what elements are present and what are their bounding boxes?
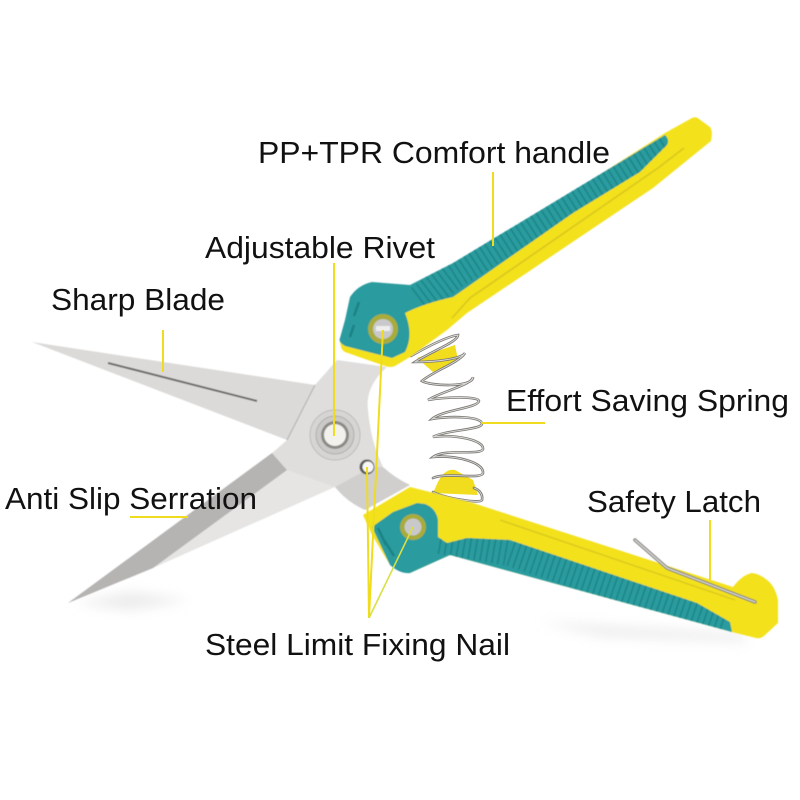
- grip ribs: [420, 140, 665, 300]
- spring and caps: [411, 335, 483, 501]
- infographic: pruning shears diagram: [5, 116, 787, 662]
- label: Safety Latch: Safety Latch: [587, 484, 761, 519]
- label: PP+TPR Comfort handle: PP+TPR Comfort handle: [258, 135, 610, 170]
- label: Steel Limit Fixing Nail: Steel Limit Fixing Nail: [205, 627, 510, 662]
- top rivet: [368, 314, 398, 344]
- scissor blades: [32, 342, 410, 603]
- teal grip: [372, 503, 732, 632]
- label: Anti Slip Serration: Anti Slip Serration: [5, 481, 257, 516]
- leader lines: [130, 172, 710, 618]
- bottom handle: [363, 487, 778, 638]
- grip ribs: [440, 540, 725, 625]
- spring caps: [417, 345, 458, 372]
- blade slot: [108, 363, 257, 401]
- label: Adjustable Rivet: Adjustable Rivet: [205, 230, 435, 265]
- pivot bolt: [310, 410, 360, 460]
- lower tang plate: [335, 462, 410, 510]
- lower blade: [68, 453, 335, 603]
- bottom rivet: [400, 514, 426, 540]
- label: Sharp Blade: Sharp Blade: [51, 282, 225, 317]
- yellow handle body: [363, 487, 778, 638]
- safety latch wire: [635, 540, 755, 602]
- spring coils: [411, 335, 483, 501]
- upper blade: [32, 342, 315, 440]
- yellow handle body: [340, 117, 712, 367]
- teal grip: [340, 135, 668, 358]
- top handle: [340, 117, 712, 367]
- label: Effort Saving Spring: Effort Saving Spring: [506, 383, 789, 418]
- limit nail: [360, 460, 374, 474]
- central blade body: [272, 360, 387, 487]
- shadows under tool: [75, 592, 750, 642]
